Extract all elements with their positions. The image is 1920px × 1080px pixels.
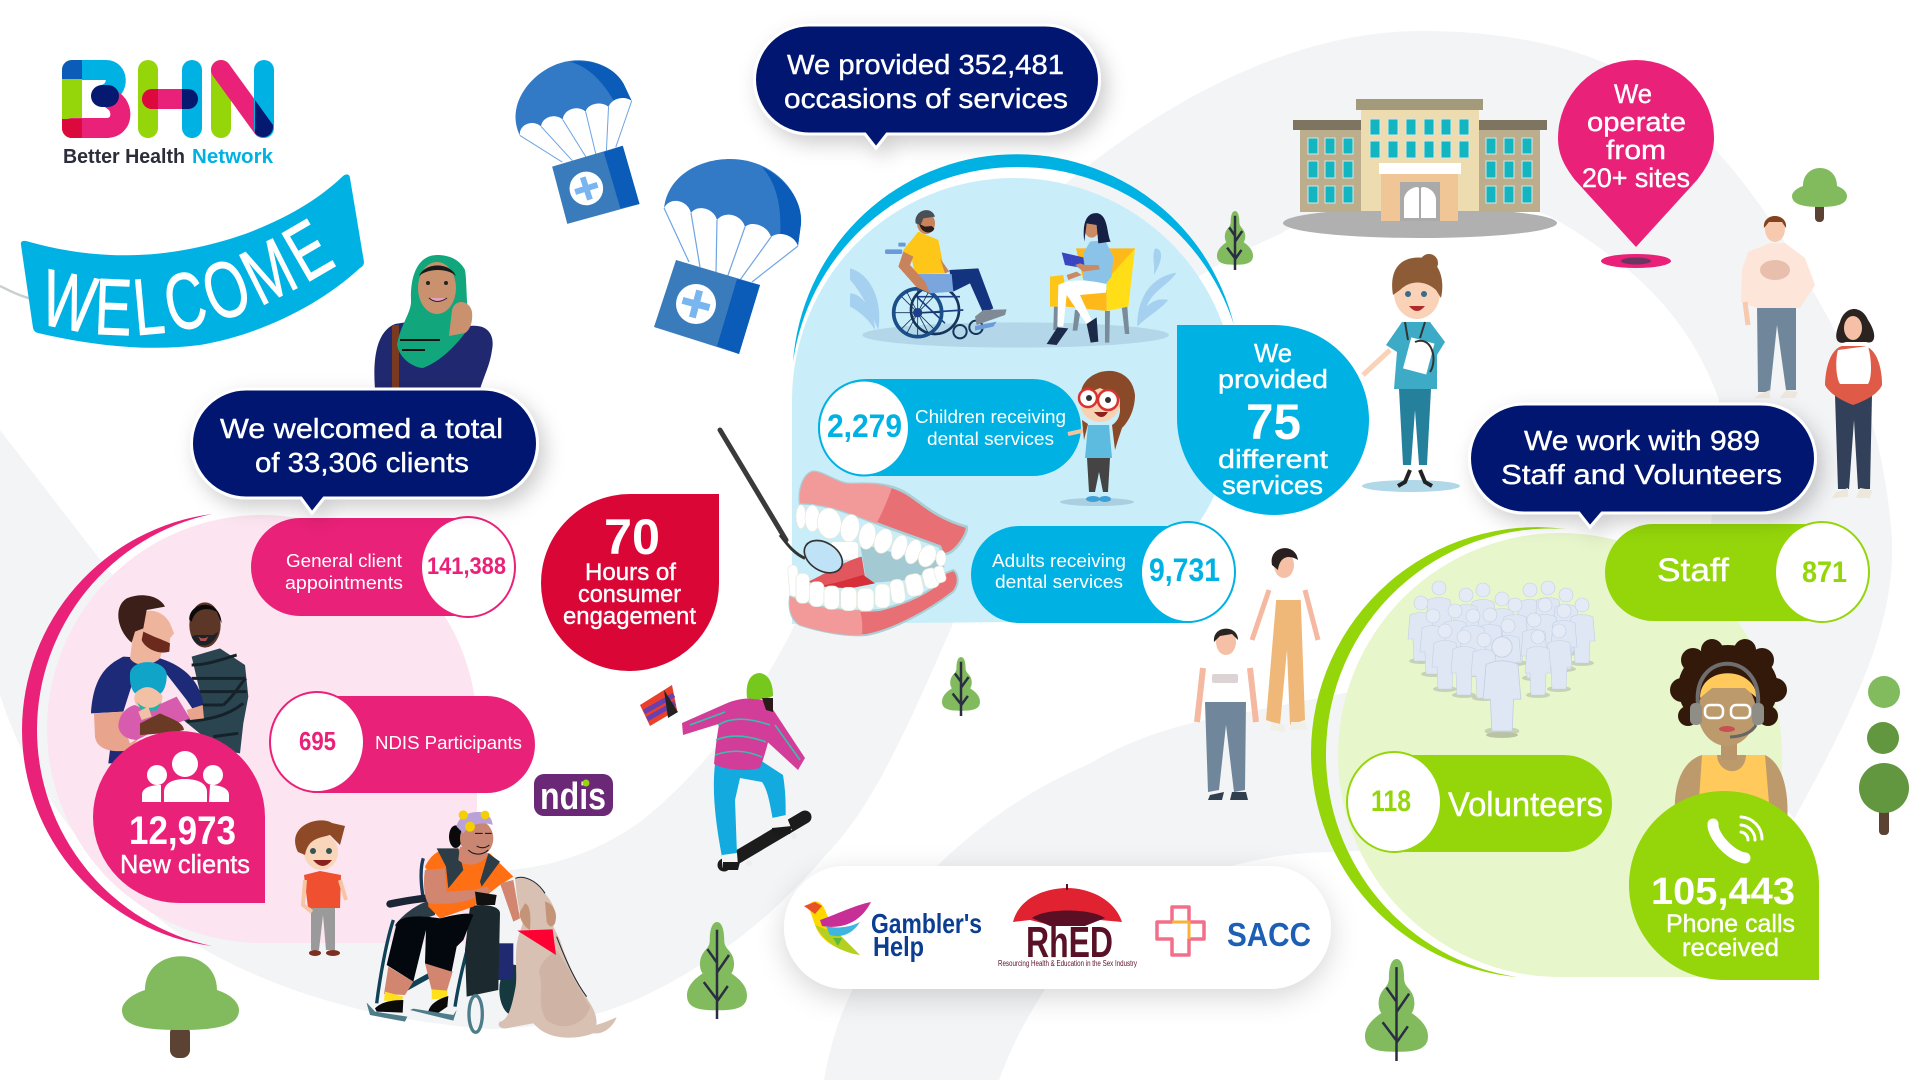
welcome banner: WELCOME [48,218,336,336]
nurse [1362,254,1460,492]
dentures and dental mirror [720,430,967,635]
teardrop: 75 services: 75 [1246,394,1301,450]
pill: adults dental [971,522,1235,623]
speech bubble: staff: Staff and Volunteers [1501,459,1782,490]
icon: people group [142,751,229,802]
pill: children dental: dental services [927,429,1054,449]
pill: NDIS participants: 695 [299,726,336,756]
welcome string [0,286,32,299]
boy [295,820,346,956]
panel: staff background [1311,527,1782,977]
pin: 20+ sites: We [1614,79,1652,109]
NDIS logo: ndis [540,776,606,818]
pill: adults dental: Adults receiving [992,551,1126,571]
logo: RhED [998,884,1137,968]
pill: adults dental: dental services [995,572,1123,592]
teardrop: new clients [93,731,265,903]
teardrop: phone calls [1629,791,1819,980]
leaf tree 3 [687,922,747,1019]
speech bubble: services: occasions of services [784,83,1068,114]
icon: phone [1713,817,1762,858]
parachute 2 [654,159,801,354]
teardrop: 70 hours: consumer [578,581,681,608]
teardrop: 70 hours: engagement [563,603,696,630]
teardrop: 75 services: different [1218,444,1329,474]
teardrop: new clients: 12,973 [129,809,236,853]
teardrop: new clients: New clients [120,849,250,879]
logo: Gambler's Help: Help [873,931,924,962]
panel: clients background [22,514,477,946]
speech bubble: services: We provided 352,481 [787,49,1064,80]
pin: 20+ sites: 20+ sites [1582,163,1690,193]
pill: general client appointments: 141,388 [427,553,506,580]
pill: NDIS participants: NDIS Participants [375,733,522,753]
tree right top [1792,168,1847,222]
leaf tree 4 [1365,959,1428,1061]
panel: services background [792,154,1236,624]
pill: volunteers: 118 [1371,785,1411,818]
therapy scene: wheelchair user and counsellor [850,210,1177,348]
speech bubble: clients [191,389,538,513]
parachute 1 [490,38,683,243]
pill: general client appointments: General client [286,551,402,571]
teardrop: 75 services: We [1254,338,1292,368]
speech bubble: services [755,25,1099,148]
teardrop: phone calls: Phone calls [1666,910,1795,938]
teardrop: 70 hours: 70 [604,509,660,565]
logo: RhED: Resourcing Health & Education in the Sex Industry [998,959,1137,968]
teardrop: 75 services: provided [1218,364,1328,394]
logo: Better Health Network [62,60,274,168]
woman in wheelchair with dog [367,810,617,1038]
teardrop: 70 hours [541,494,719,671]
pill: staff [1605,522,1869,622]
phone operator [1670,639,1788,825]
logo: Gambler's Help [804,901,982,962]
logo: SACC: SACC [1227,916,1311,953]
pill: general client appointments [251,517,515,617]
teardrop: phone calls: 105,443 [1651,871,1795,913]
logo: RhED: RhED [1026,918,1113,967]
pill: volunteers [1347,752,1612,852]
speech bubble: clients: of 33,306 clients [255,447,469,478]
hospital building [1283,99,1557,238]
pill: children dental [818,379,1081,476]
family: two men and baby [91,595,248,763]
speech bubble: staff [1469,404,1815,527]
pin: 20+ sites [1558,60,1714,268]
pin: 20+ sites: from [1606,135,1666,165]
leaf tree 2 [942,657,980,716]
big tree left [122,956,239,1058]
pill: NDIS participants [270,692,535,793]
leaf tree 1 [1217,211,1253,270]
pill: staff: Staff [1657,552,1729,588]
speech bubble: staff: We work with 989 [1524,425,1760,456]
pill: adults dental: 9,731 [1149,552,1220,588]
pill: children dental: Children receiving [915,407,1066,427]
teardrop: 75 services [1177,325,1369,515]
teardrop: 70 hours: Hours of [585,559,676,586]
speech bubble: clients: We welcomed a total [220,413,503,444]
woman with red sleeves [1825,309,1882,498]
dotted tree right [1859,676,1909,835]
skateboarder with pride flag [640,673,805,870]
pin: 20+ sites: operate [1587,107,1686,137]
pill: children dental: 2,279 [827,408,902,444]
logo: Gambler's Help: Gambler's [871,908,982,939]
pill: volunteers: Volunteers [1448,786,1603,824]
panel: partner logos [784,866,1331,989]
pill: staff: 871 [1802,556,1847,589]
logo: Better Health Network: Better Health [63,146,185,168]
teardrop: 75 services: services [1222,470,1323,500]
logo: Better Health Network: Network [192,146,274,168]
man and woman standing, centre right [1197,548,1318,800]
teardrop: phone calls: received [1682,934,1779,962]
woman in hijab on phone [374,255,493,389]
girl with glasses [1060,371,1135,506]
man in hoodie [1741,216,1815,398]
crowd of volunteers [1408,581,1595,738]
pill: general client appointments: appointments [285,573,403,593]
logo: SACC [1157,907,1311,955]
